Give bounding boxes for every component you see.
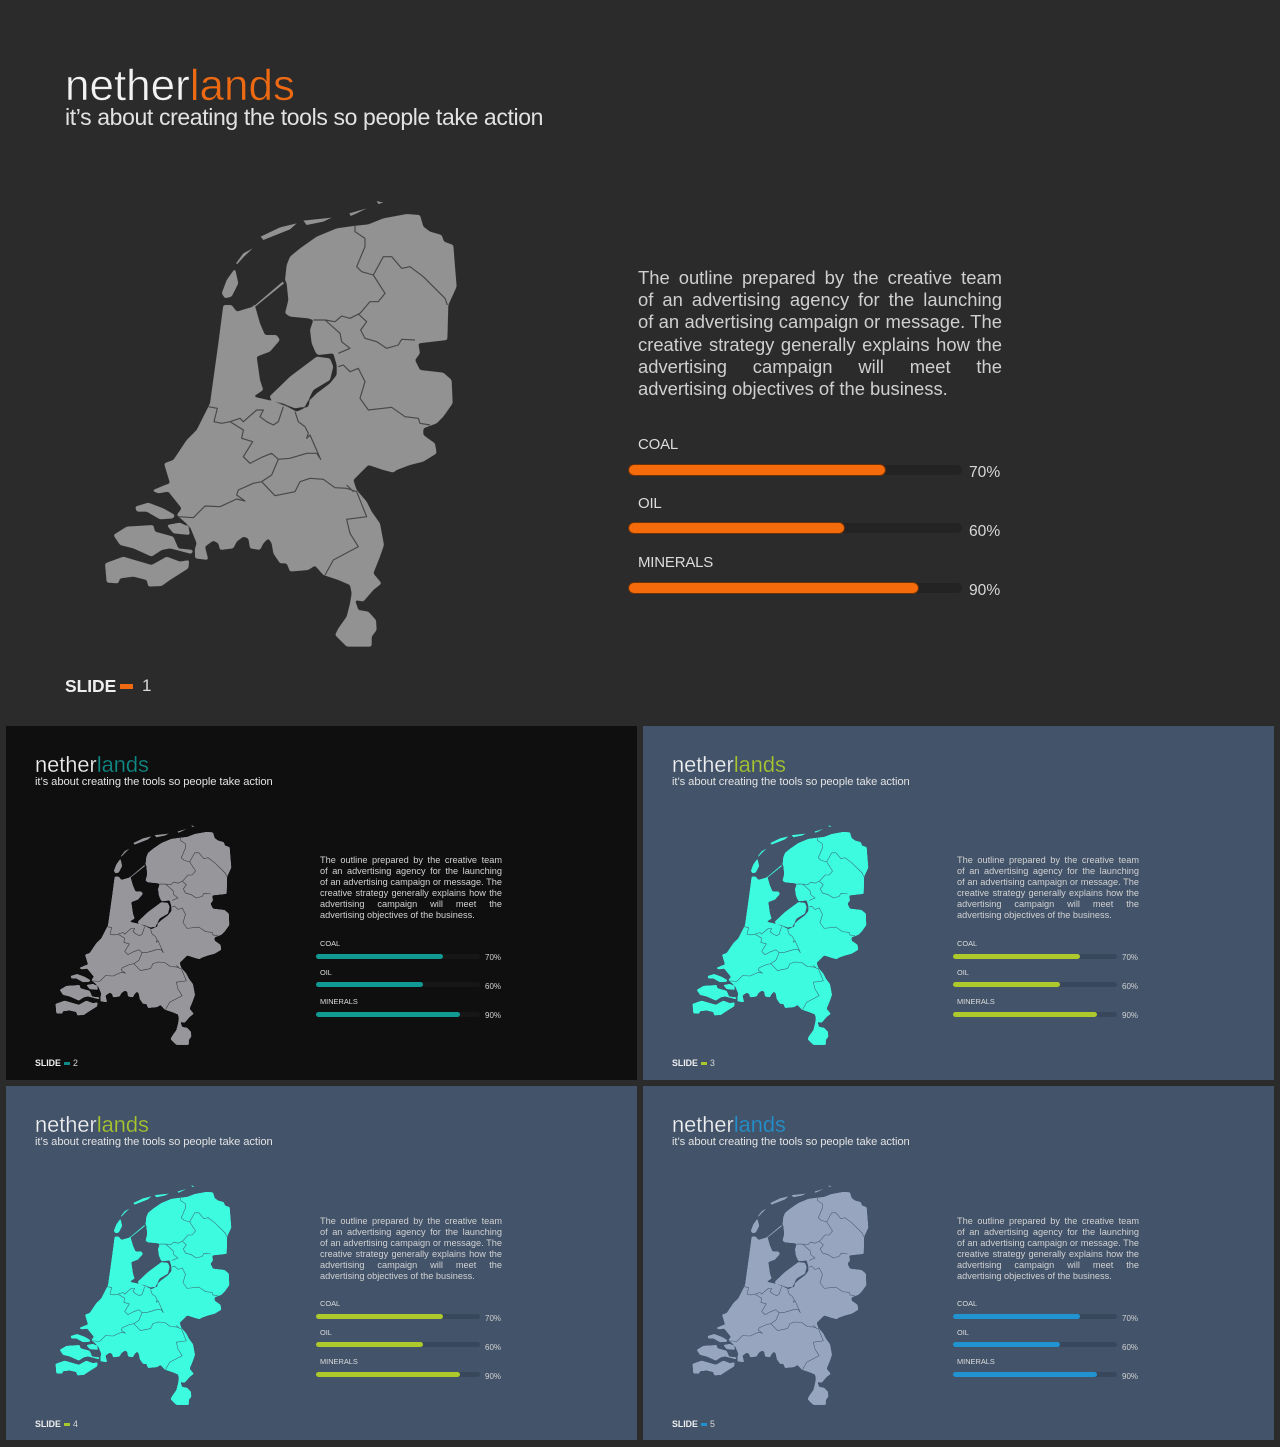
value: 60%: 60% <box>485 1343 501 1352</box>
body text: of an advertising campaign or message. The <box>320 1238 502 1248</box>
subtitle: it’s about creating the tools so people take action <box>672 1136 910 1148</box>
subtitle: it’s about creating the tools so people take action <box>35 776 273 788</box>
body text: advertising objectives of the business. <box>320 1271 475 1281</box>
body text: creative strategy generally explains how the <box>957 1249 1139 1259</box>
body text <box>320 1216 502 1281</box>
label: coal: COAL <box>320 939 340 948</box>
slide number: SLIDE <box>672 1419 698 1429</box>
label: coal: COAL <box>638 436 678 453</box>
panel: slide 4 blue with turquoise map <box>6 1086 637 1440</box>
body text: of an advertising agency for the launching <box>638 289 1002 310</box>
body text <box>320 855 502 920</box>
body text: of an advertising campaign or message. The <box>957 1238 1139 1248</box>
body text: of an advertising campaign or message. The <box>320 877 502 887</box>
body text <box>638 267 1002 399</box>
body text <box>957 855 1139 920</box>
body text: The outline prepared by the creative team <box>957 1216 1139 1226</box>
bar: minerals 90% <box>316 1012 460 1017</box>
map of the Netherlands <box>56 826 232 1045</box>
slide number: 1 <box>142 676 151 695</box>
body text: The outline prepared by the creative team <box>320 855 502 865</box>
bar: oil 60% <box>628 522 960 534</box>
label: coal: COAL <box>957 939 977 948</box>
value: 90%: 90% <box>485 1011 501 1020</box>
body text: advertising campaign will meet the <box>320 1260 502 1270</box>
slide number: SLIDE <box>35 1058 61 1068</box>
value: 70%: 70% <box>1122 953 1138 962</box>
body text: creative strategy generally explains how the <box>638 334 1002 355</box>
subtitle: it’s about creating the tools so people take action <box>672 776 910 788</box>
value: 60%: 60% <box>485 982 501 991</box>
bar: coal 70% <box>953 1314 1117 1319</box>
bar: oil 60% <box>953 982 1117 987</box>
slide number: 2 <box>73 1058 78 1068</box>
body text: of an advertising campaign or message. The <box>957 877 1139 887</box>
slide number <box>35 1419 78 1429</box>
slide number <box>35 1058 78 1068</box>
bar: minerals 90% <box>316 1372 480 1377</box>
map of the Netherlands <box>105 201 457 647</box>
body text <box>957 1216 1139 1281</box>
slide number: SLIDE <box>65 676 116 696</box>
label: oil: OIL <box>320 1328 332 1337</box>
title: netherlands <box>35 1112 149 1137</box>
value: 90%: 90% <box>1122 1372 1138 1381</box>
slide number: SLIDE <box>35 1419 61 1429</box>
panel: slide 3 blue with turquoise map <box>643 726 1274 1080</box>
body text: creative strategy generally explains how the <box>957 888 1139 898</box>
body text: creative strategy generally explains how the <box>320 1249 502 1259</box>
slide number: 5 <box>710 1419 715 1429</box>
panel: slide 1 main <box>0 0 1280 720</box>
body text: creative strategy generally explains how the <box>320 888 502 898</box>
slide number <box>65 676 151 696</box>
map of the Netherlands <box>692 1186 868 1405</box>
value: 60%: 60% <box>1122 1343 1138 1352</box>
label: minerals: MINERALS <box>638 554 713 571</box>
body text: advertising objectives of the business. <box>320 910 475 920</box>
label: minerals: MINERALS <box>320 997 358 1006</box>
title: netherlands <box>672 1112 786 1137</box>
body text: advertising campaign will meet the <box>320 899 502 909</box>
bar: minerals 90% <box>628 582 960 594</box>
body text: advertising objectives of the business. <box>638 378 948 399</box>
bar: coal 70% <box>953 954 1117 959</box>
slide number: 4 <box>73 1419 78 1429</box>
bar: coal 70% <box>316 954 443 959</box>
label: coal: COAL <box>320 1299 340 1308</box>
body text: of an advertising campaign or message. The <box>638 311 1002 332</box>
body text: of an advertising agency for the launching <box>320 1227 502 1237</box>
value: 60%: 60% <box>1122 982 1138 991</box>
value: 70%: 70% <box>485 1314 501 1323</box>
label: oil: OIL <box>320 968 332 977</box>
body text: advertising objectives of the business. <box>957 1271 1112 1281</box>
bar: coal 70% <box>316 1314 480 1319</box>
bar: oil 60% <box>316 982 423 987</box>
value: 70%: 70% <box>969 464 1000 481</box>
title: netherlands <box>35 752 149 777</box>
label: oil: OIL <box>957 1328 969 1337</box>
slide number <box>672 1419 715 1429</box>
value: 70%: 70% <box>1122 1314 1138 1323</box>
bar: coal 70% <box>628 464 960 476</box>
panel: slide 2 black <box>6 726 637 1080</box>
map of the Netherlands <box>692 826 868 1045</box>
value: 90%: 90% <box>969 582 1000 599</box>
label: oil: OIL <box>638 495 662 512</box>
bar: oil 60% <box>316 1342 480 1347</box>
label: minerals: MINERALS <box>957 1357 995 1366</box>
body text: advertising campaign will meet the <box>638 356 1002 377</box>
bar: minerals 90% <box>953 1012 1117 1017</box>
body text: The outline prepared by the creative team <box>320 1216 502 1226</box>
body text: The outline prepared by the creative team <box>957 855 1139 865</box>
slide number: 3 <box>710 1058 715 1068</box>
body text: advertising objectives of the business. <box>957 910 1112 920</box>
body text: advertising campaign will meet the <box>957 1260 1139 1270</box>
subtitle: it’s about creating the tools so people take action <box>65 104 543 130</box>
label: oil: OIL <box>957 968 969 977</box>
panel: slide 5 blue with grey-blue map <box>643 1086 1274 1440</box>
label: minerals: MINERALS <box>320 1357 358 1366</box>
value: 90%: 90% <box>485 1372 501 1381</box>
subtitle: it’s about creating the tools so people take action <box>35 1136 273 1148</box>
value: 60%: 60% <box>969 523 1000 540</box>
bar: minerals 90% <box>953 1372 1117 1377</box>
title: netherlands <box>65 61 295 110</box>
body text: of an advertising agency for the launching <box>957 866 1139 876</box>
title: netherlands <box>672 752 786 777</box>
label: coal: COAL <box>957 1299 977 1308</box>
body text: The outline prepared by the creative team <box>638 267 1002 288</box>
value: 70%: 70% <box>485 953 501 962</box>
value: 90%: 90% <box>1122 1011 1138 1020</box>
body text: advertising campaign will meet the <box>957 899 1139 909</box>
body text: of an advertising agency for the launching <box>957 1227 1139 1237</box>
label: minerals: MINERALS <box>957 997 995 1006</box>
map of the Netherlands <box>56 1186 232 1405</box>
slide number <box>672 1058 715 1068</box>
bar: oil 60% <box>953 1342 1117 1347</box>
body text: of an advertising agency for the launching <box>320 866 502 876</box>
slide number: SLIDE <box>672 1058 698 1068</box>
